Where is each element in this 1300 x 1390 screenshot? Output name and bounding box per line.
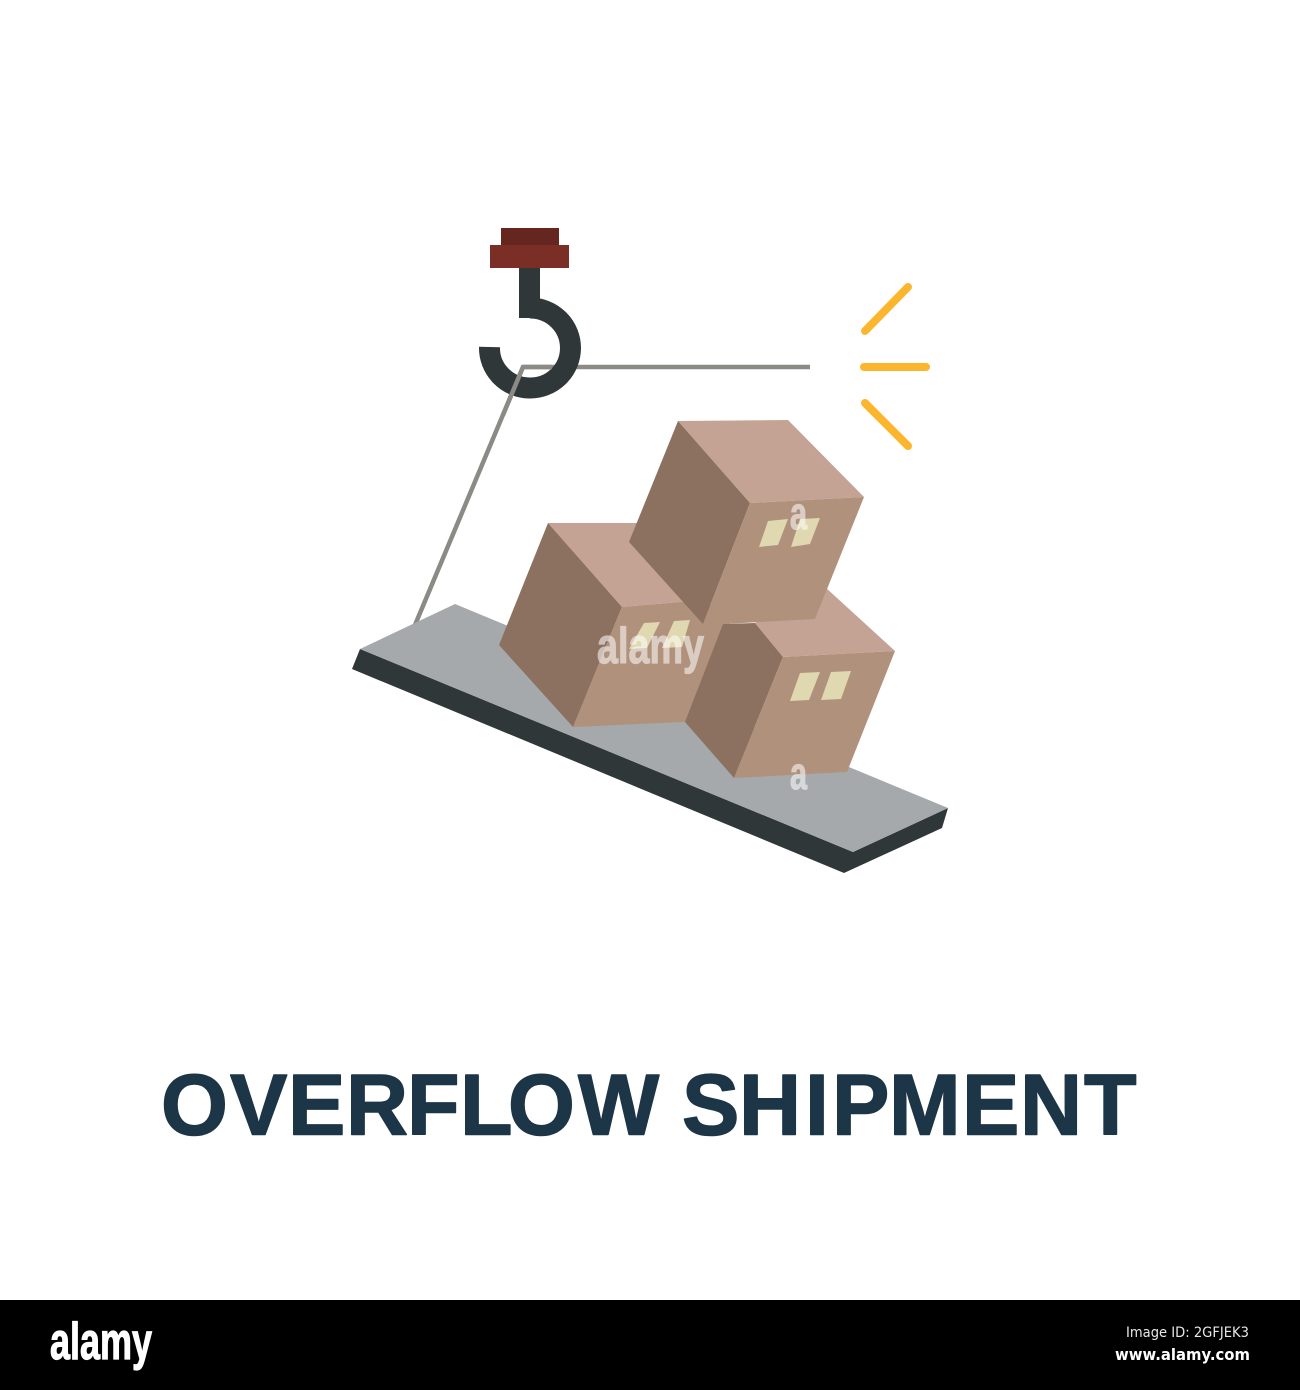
rope: diagonal and horizontal cable: [415, 367, 810, 625]
watermark: alamy: a: [790, 748, 808, 799]
tilted platform: [352, 604, 948, 873]
icon: crane hook: [489, 228, 570, 415]
icon: yellow alert rays: [864, 287, 926, 446]
watermark: alamy: alamy: [597, 618, 704, 674]
image id: Image ID: 2GFJEK3: [1126, 1325, 1249, 1341]
box: right: [685, 587, 895, 778]
watermark: alamy: a: [790, 488, 808, 539]
website: www.alamy.com: [1115, 1345, 1250, 1364]
box: left: [499, 523, 730, 727]
footer bar: [0, 1300, 1300, 1390]
title: OVERFLOW SHIPMENT: [161, 1058, 1137, 1154]
watermark: alamy: [597, 488, 808, 799]
box: top: [629, 420, 864, 624]
footer logo: alamy: [50, 1313, 152, 1371]
